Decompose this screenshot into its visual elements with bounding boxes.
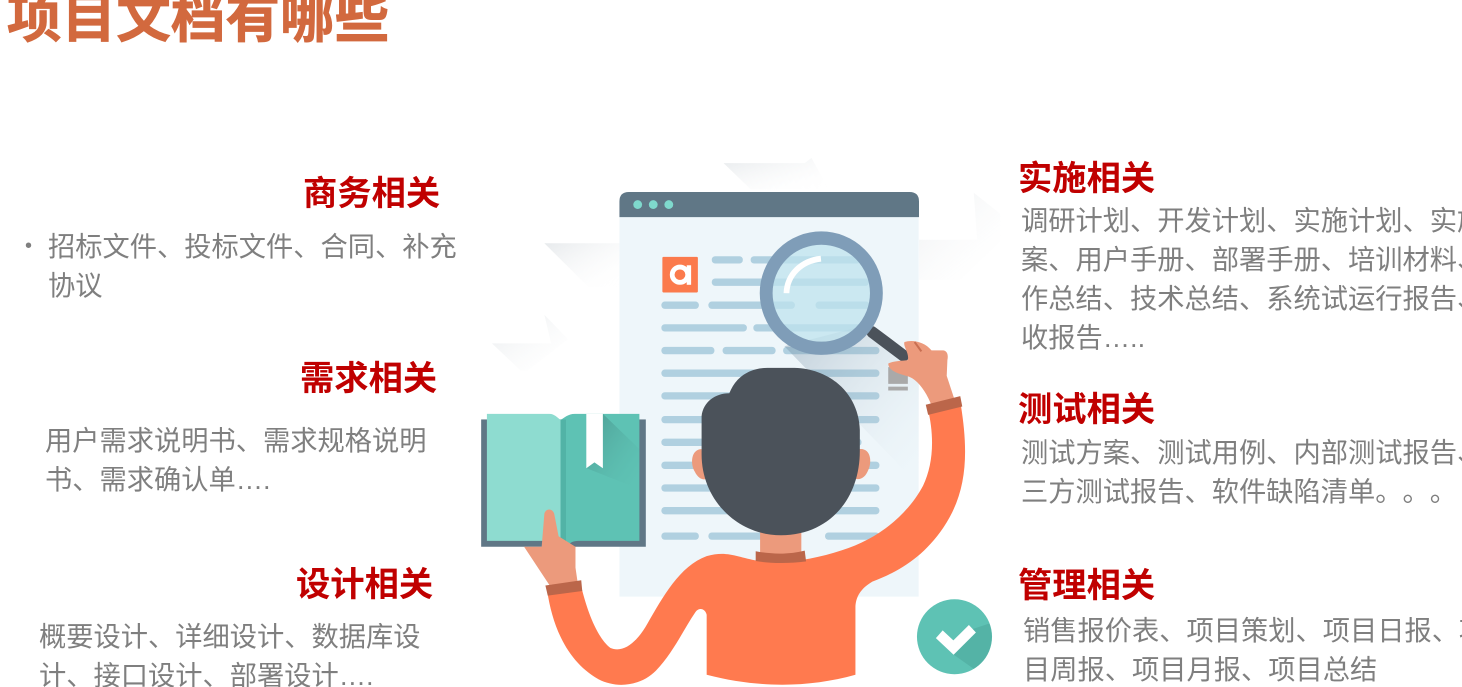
heading: 设计相关: 设计相关 <box>296 566 433 604</box>
heading: 实施相关: 实施相关 <box>1018 160 1155 198</box>
document window <box>619 192 919 597</box>
heading: 需求相关: 需求相关 <box>300 360 437 398</box>
logo <box>662 257 698 292</box>
bullet text: 商务相关 <box>25 231 457 301</box>
bullet text: 商务相关: 协议 <box>48 270 103 301</box>
head <box>692 368 870 535</box>
heading: 测试相关: 测试相关 <box>1018 391 1155 429</box>
text: 需求相关 <box>45 425 427 495</box>
window dots <box>633 200 673 209</box>
text: 需求相关: 书、需求确认单…. <box>45 464 271 495</box>
magnifier shadow <box>784 325 919 486</box>
raised hand <box>888 341 954 405</box>
right cuff <box>926 396 962 415</box>
text: 测试相关 <box>1021 437 1462 507</box>
person body <box>547 396 965 685</box>
magnifier <box>766 238 903 356</box>
left hand <box>524 509 582 596</box>
small grey mark <box>888 367 908 390</box>
heading: 管理相关: 管理相关 <box>1018 567 1155 605</box>
text: 设计相关: 概要设计、详细设计、数据库设 <box>39 621 421 652</box>
text: 测试相关: 三方测试报告、软件缺陷清单。。。 <box>1021 476 1457 507</box>
text: 设计相关 <box>39 621 421 687</box>
text: 需求相关: 用户需求说明书、需求规格说明 <box>45 425 427 456</box>
left cuff <box>545 580 582 596</box>
bullet text: 商务相关: • <box>25 235 32 257</box>
bullet text: 商务相关: 招标文件、投标文件、合同、补充 <box>48 231 457 262</box>
bookmark <box>586 414 603 468</box>
open book <box>481 414 646 547</box>
check badge <box>917 599 992 674</box>
heading: 商务相关: 商务相关 <box>303 175 440 213</box>
collar <box>756 551 806 563</box>
text: 实施相关 <box>1021 205 1462 353</box>
text: 管理相关 <box>1023 614 1462 684</box>
text: 管理相关: 目周报、项目月报、项目总结 <box>1023 654 1377 684</box>
text: 实施相关: 收报告….. <box>1021 322 1145 353</box>
cloud shadows <box>492 158 1000 371</box>
text lines <box>661 256 879 540</box>
